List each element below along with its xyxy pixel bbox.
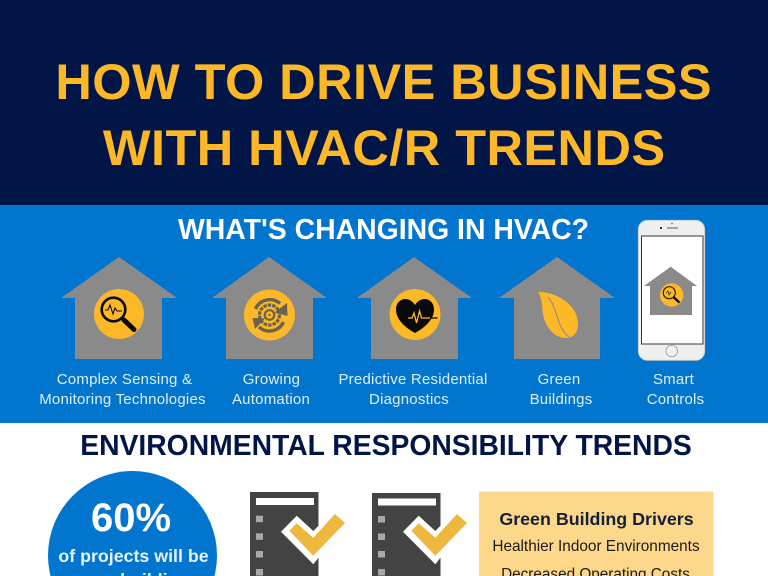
panel: green building drivers [479,492,714,576]
label: predictive residential: Predictive Residential [338,371,488,388]
icon: gear with rotating arrows [252,300,288,331]
stat value: 60% [91,496,171,540]
title: HOW TO DRIVE BUSINESS [55,53,712,110]
house: predictive residential diagnostics [357,257,472,359]
icon: magnifier with pulse [102,298,134,330]
house: complex sensing [61,257,177,359]
label: smart: Smart [653,371,695,388]
label: complex sensing: Complex Sensing & [57,371,192,388]
icon: checklist document 2 [372,493,468,576]
drivers heading: Green Building Drivers [499,509,694,529]
smartphone: smart controls [638,220,705,360]
stat circle: 60 percent [48,471,217,576]
label: diagnostics: Diagnostics [369,391,449,408]
stat description: of projects will be [58,546,209,566]
label: green: Green [538,371,580,388]
label: controls: Controls [647,391,704,408]
label: automation: Automation [232,391,310,408]
header band with title [0,0,768,205]
mini house icon [644,267,697,315]
label: growing: Growing [243,371,300,388]
heading: what's changing: WHAT'S CHANGING IN HVAC? [178,214,589,246]
house: green buildings [499,257,615,359]
icon: leaf [538,292,578,338]
heading: environmental responsibility trends: ENVIRONMENTAL RESPONSIBILITY TRENDS [80,429,692,461]
house: growing automation [212,257,327,359]
labels under houses [39,371,704,408]
title: WITH HVAC/R TRENDS [103,119,666,176]
icon: heart with pulse [396,299,438,333]
panel: what's changing in HVAC [0,205,768,423]
title [58,64,710,166]
driver: healthier indoor environments: Healthier Indoor Environments [492,538,700,555]
label: monitoring technologies: Monitoring Technologies [39,391,206,408]
label: buildings: Buildings [530,391,592,408]
icon: checklist document 1 [250,492,346,576]
